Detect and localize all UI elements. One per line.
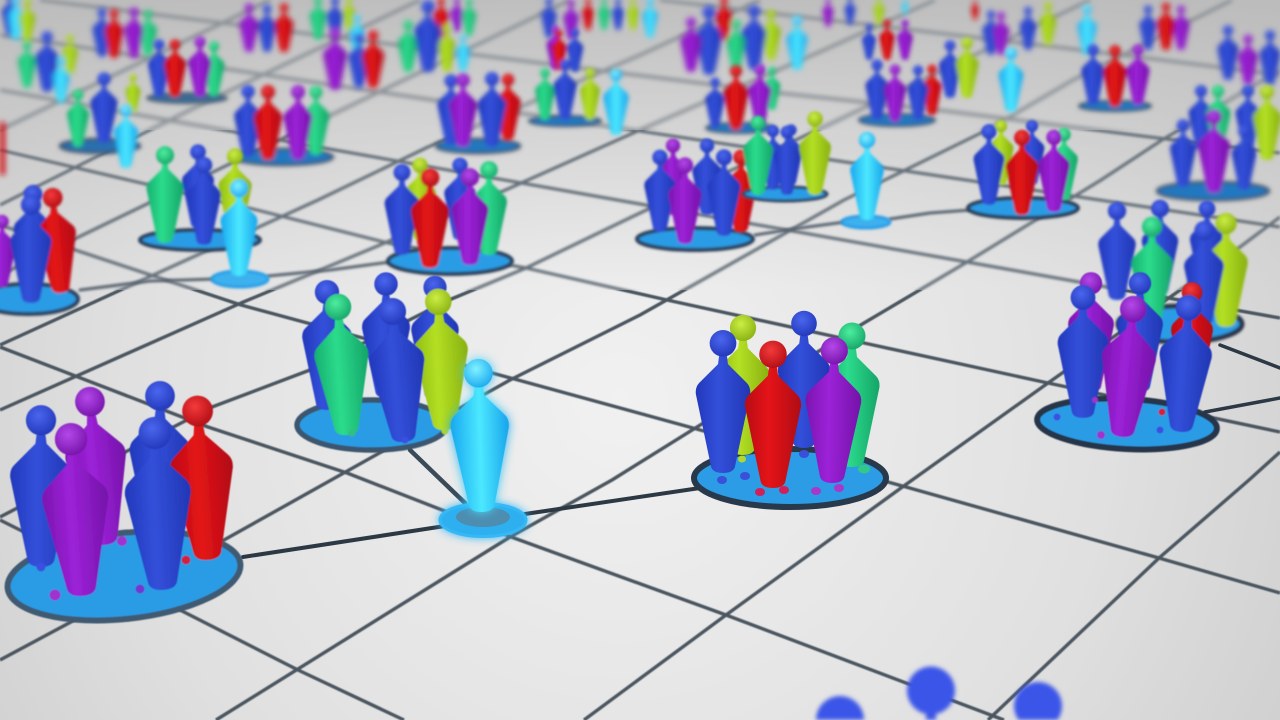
small balls [348, 428, 448, 444]
near grid lines [0, 290, 1280, 720]
front figures [696, 330, 862, 488]
front figures [310, 287, 472, 444]
connection lines [80, 210, 1280, 557]
cluster: top 3 [240, 3, 293, 52]
platform [297, 400, 447, 450]
far grid lines [0, 0, 1280, 130]
cluster: middle left [140, 144, 260, 250]
cluster: top right [1218, 25, 1280, 85]
head 2 [907, 667, 955, 720]
head 3 [1014, 682, 1062, 720]
foreground blurred heads [816, 667, 1062, 720]
cluster: middle centre back [743, 111, 831, 201]
cyan person with pad, middle left [212, 179, 268, 287]
cluster: second row 5 [529, 25, 601, 126]
cluster: top 10 [1139, 2, 1190, 50]
cluster: second row 8 [1079, 44, 1151, 111]
middle grid lines [0, 130, 1280, 290]
back figures [716, 311, 880, 467]
highlighted cyan person [440, 358, 526, 536]
cluster: top 7 [681, 0, 807, 75]
front figures [1058, 285, 1216, 439]
cluster: second row 3 [233, 85, 333, 165]
cluster: top 6 [541, 0, 658, 40]
cyan person with pad, middle right [842, 132, 890, 228]
small balls [1054, 397, 1166, 439]
cluster: middle centre [637, 138, 757, 250]
cluster: front centre [694, 311, 886, 507]
cluster: middle far left [0, 185, 81, 314]
small balls [36, 536, 190, 600]
cluster: second row 7 [859, 20, 979, 126]
far clusters, top row [0, 0, 1280, 175]
cluster: second row 2 [147, 36, 227, 103]
cluster: top left corner [2, 0, 78, 103]
cyan person, second row centre [603, 69, 629, 135]
back figures [302, 272, 459, 410]
cluster: second row right [1157, 85, 1280, 200]
back figures [1068, 272, 1213, 392]
second-row clusters [60, 20, 1280, 200]
cluster: second row 6 [705, 64, 780, 133]
cluster: top 8 [822, 0, 908, 27]
platform [3, 521, 245, 631]
platform [1036, 394, 1218, 454]
cluster: middle right [968, 120, 1078, 218]
middle-row clusters [0, 111, 1248, 342]
cluster: upper right back [1098, 200, 1248, 342]
cluster: top 4 [310, 0, 384, 90]
cluster: top 9 [971, 0, 1097, 55]
cluster: middle centre left [385, 158, 512, 274]
platform [694, 449, 886, 507]
glowing platform [440, 504, 526, 536]
cluster: top 2 [93, 7, 157, 58]
platform inner ring [456, 507, 510, 527]
cyan person, second row left [114, 104, 138, 168]
back figures [10, 381, 239, 567]
cluster: second row left [60, 72, 140, 153]
cluster: top 5 [398, 0, 476, 72]
glowing figure [449, 358, 511, 513]
cluster: front centre left [297, 272, 472, 450]
head 1 [816, 696, 864, 720]
cluster: second row 4 [436, 72, 521, 153]
red figure sliver at left edge [0, 122, 5, 175]
cluster: front left [3, 381, 245, 631]
small balls [717, 450, 870, 496]
cluster: front right [1036, 272, 1218, 454]
cyan person, second row right [999, 47, 1023, 112]
front figures [37, 415, 196, 598]
